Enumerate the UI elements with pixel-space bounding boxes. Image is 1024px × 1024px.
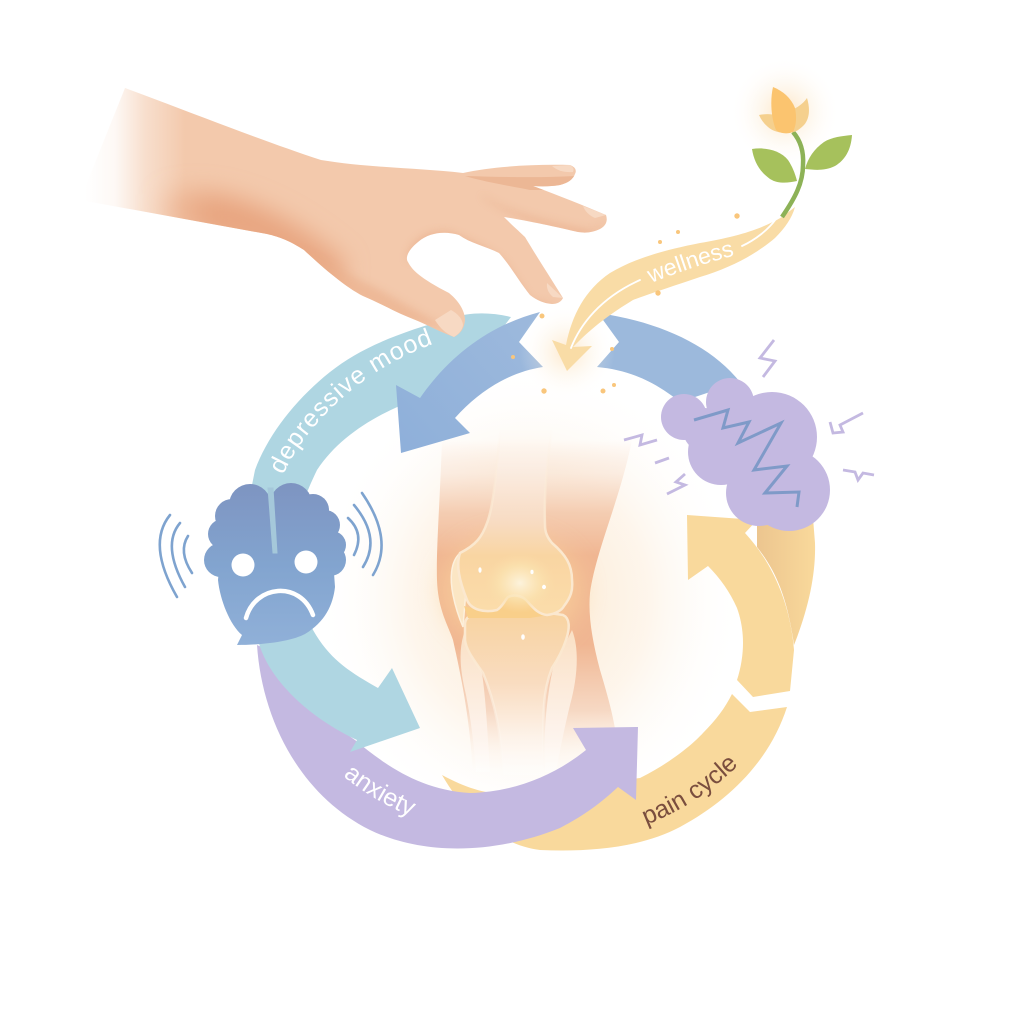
label: pain cycle: pain cycle (642, 758, 736, 830)
nerve zigzag (694, 410, 799, 507)
patella (451, 553, 466, 627)
label: depressive mood: depressive mood (271, 328, 432, 472)
left leaf (752, 148, 797, 183)
flower glow (730, 57, 840, 167)
background glow around knee (315, 365, 745, 835)
sparkles on bones (478, 567, 546, 640)
brain fissure (268, 488, 277, 553)
cartilage (464, 595, 555, 618)
leg silhouette (437, 440, 632, 775)
tibia (465, 611, 569, 775)
ribbon (552, 207, 795, 371)
femur (458, 430, 572, 615)
right leaf (805, 135, 852, 170)
arrow: blue right (597, 313, 740, 402)
wellness sparkle dots (511, 213, 740, 394)
middle nail (583, 206, 606, 218)
hand shape (110, 88, 607, 337)
stem (782, 132, 803, 217)
brain head (204, 483, 346, 645)
cloud body (661, 378, 830, 531)
arrow: blue left (396, 312, 543, 453)
femur hotspot (484, 553, 556, 613)
arrow: depressive mood light blue (245, 313, 511, 752)
arrow: pain cycle upper yellow back band (757, 518, 815, 645)
index nail (547, 283, 563, 298)
thumb nail (435, 310, 463, 337)
frown (246, 591, 313, 618)
eyes (232, 550, 318, 576)
fibula right (544, 630, 577, 772)
fibula left (461, 630, 490, 772)
icon: flower (730, 57, 852, 217)
knee illustration (437, 430, 632, 775)
ribbon highlight (571, 219, 776, 348)
arrow: pain cycle lower yellow arc (442, 694, 787, 850)
right petal (785, 98, 809, 132)
icon: sad brain (204, 483, 346, 645)
icon: pain cloud (661, 378, 830, 531)
label: anxiety: anxiety (345, 768, 416, 818)
pain sparks (624, 340, 874, 494)
ring nail (552, 165, 574, 172)
vibration lines (160, 493, 382, 597)
arrow: anxiety purple (257, 645, 638, 848)
label: wellness: wellness (646, 244, 734, 282)
glow at wellness arrow tip (519, 304, 615, 400)
centre petal (771, 87, 796, 133)
hand (110, 88, 607, 337)
wellness ribbon arrow (552, 207, 795, 371)
knee joint glow (442, 535, 582, 645)
arrow: pain cycle upper yellow (687, 515, 794, 697)
left petal (759, 114, 794, 133)
